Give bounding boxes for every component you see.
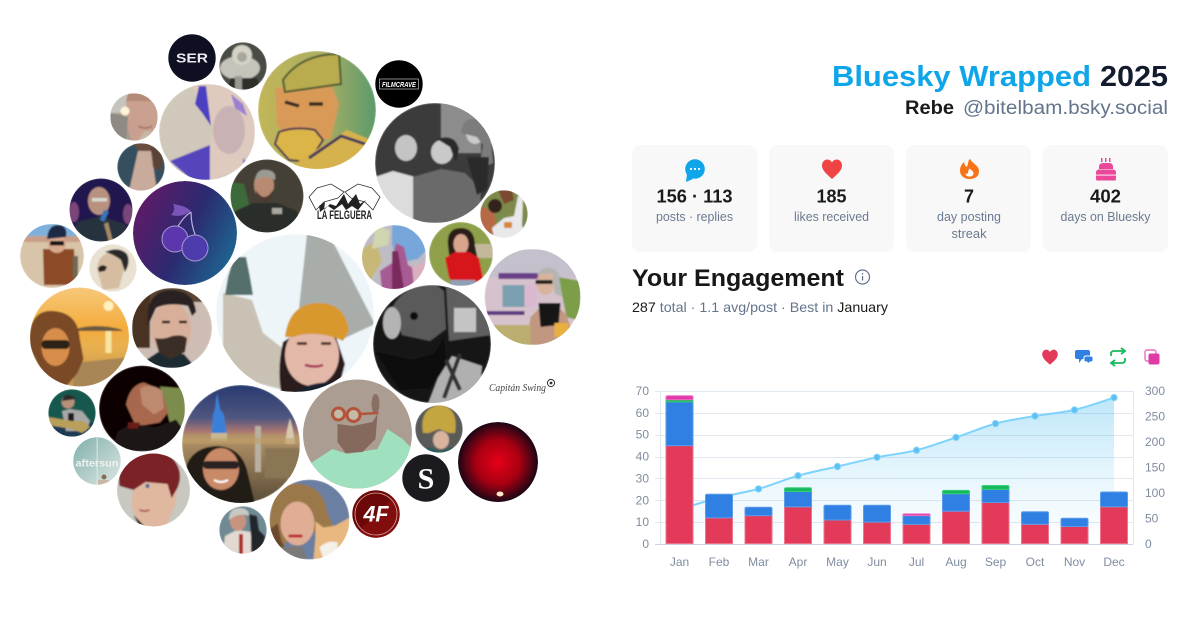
- icon: info: [856, 270, 870, 284]
- right axis labels: 150: [1145, 460, 1165, 474]
- right axis labels: 200: [1145, 435, 1165, 449]
- panel: posts and replies stat card: posts · replies: [656, 209, 733, 224]
- icon: legend replies: [1075, 350, 1093, 364]
- panel: posting streak stat card: 7: [964, 186, 974, 206]
- panel: posting streak stat card: day posting: [937, 209, 1001, 224]
- user name and handle: Rebe: [905, 98, 954, 119]
- heading: Your Engagement: Your Engagement: [632, 265, 844, 292]
- avatar: woman with golden headdress: [415, 405, 463, 453]
- user name and handle: @bitelbam.bsky.social: [963, 98, 1168, 119]
- logo: La Felguera: [309, 184, 380, 222]
- left axis labels: 60: [636, 406, 649, 420]
- title: 2025: [1100, 61, 1168, 93]
- avatar: neck with blue paint: [159, 84, 255, 180]
- avatar: red glowing sphere: [458, 422, 538, 502]
- icon: legend reposts: [1111, 348, 1125, 366]
- avatar: moustache portrait: [89, 244, 137, 292]
- avatar: black and white three women: [375, 103, 495, 223]
- icon: speech bubble: [685, 159, 705, 182]
- avatar: man in black t-shirt: [230, 159, 305, 233]
- icon: legend likes: [1042, 350, 1058, 365]
- panel: likes stat card: likes received: [794, 209, 869, 224]
- avatar: FilmCrave logo: FILMCRAVE: [382, 80, 417, 89]
- avatar: FilmCrave logo: [375, 60, 423, 108]
- month labels: Feb: [709, 555, 730, 569]
- chart: monthly engagement bars and cumulative line: [636, 384, 1165, 569]
- left axis labels: 10: [636, 515, 649, 529]
- avatar: SER logo: [168, 34, 216, 82]
- panel: days on Bluesky stat card: [1043, 145, 1168, 252]
- avatar: S logo: S: [418, 462, 434, 496]
- avatar: pastel abstract: [360, 225, 428, 291]
- left axis labels: [636, 384, 649, 551]
- avatar: woman on the beach: [20, 224, 84, 288]
- month labels: Apr: [789, 555, 807, 569]
- panel: posting streak stat card: streak: [952, 226, 987, 241]
- avatar: aftersun poster: [73, 437, 121, 485]
- engagement summary: 287 total · 1.1 avg/post · Best in January: [632, 299, 888, 315]
- avatar: painted bearded portrait: [258, 51, 376, 170]
- right axis labels: 50: [1145, 512, 1159, 526]
- avatar: 4F logo: 4F: [363, 502, 389, 526]
- month labels: Mar: [748, 555, 769, 569]
- left axis labels: 30: [636, 472, 649, 486]
- avatar: woman in sunlight: [110, 93, 158, 141]
- left axis labels: 20: [636, 494, 649, 508]
- avatar: woman above New York skyline: [182, 385, 300, 504]
- avatar: black and white man: [373, 285, 491, 404]
- avatar: 4F logo: [352, 490, 400, 538]
- panel: days on Bluesky stat card: days on Bluesky: [1060, 209, 1151, 224]
- month labels: Aug: [945, 555, 967, 569]
- month labels: May: [826, 555, 849, 569]
- panel: days on Bluesky stat card: 402: [1090, 186, 1121, 206]
- avatar: singer with microphone: [69, 178, 133, 242]
- icon: legend quotes: [1145, 350, 1160, 364]
- panel: likes stat card: [769, 145, 894, 252]
- avatar: purple cherries: [133, 181, 237, 285]
- avatar: man on the telephone: [219, 506, 267, 554]
- panel: posting streak stat card: [906, 145, 1031, 252]
- left axis labels: 0: [642, 537, 649, 551]
- month labels: Sep: [985, 555, 1006, 569]
- logo: La Felguera: LA FELGUERA: [317, 210, 372, 222]
- icon: flame: [960, 158, 979, 179]
- avatar: illustrated man with red glasses: [302, 379, 412, 489]
- avatar: woman at sunset: [29, 287, 129, 387]
- panel: posts and replies stat card: [632, 145, 757, 252]
- right axis labels: 0: [1145, 537, 1152, 551]
- icon: heart: [822, 160, 842, 179]
- panel: avatar bubble cluster: [20, 34, 580, 560]
- avatar: vintage baby photo: [219, 42, 267, 90]
- month labels: Jun: [867, 555, 887, 569]
- avatar: man in rainbow shirt: [480, 190, 528, 240]
- cumulative points: [755, 394, 1117, 492]
- chart legend: [1042, 348, 1160, 366]
- stacked bars: [666, 396, 1128, 544]
- avatar: main selfie with tower: [216, 234, 375, 394]
- avatar: S logo: [402, 454, 450, 502]
- month labels: Jan: [670, 555, 689, 569]
- month labels: Oct: [1026, 555, 1045, 569]
- cumulative line: [680, 398, 1114, 509]
- panel: likes stat card: 185: [816, 186, 846, 206]
- avatar: SER logo: SER: [176, 50, 209, 66]
- left axis labels: 70: [636, 384, 649, 398]
- avatar: woman in denim: [117, 143, 165, 191]
- avatar: red-haired woman: [116, 451, 190, 528]
- cumulative area: [680, 398, 1114, 544]
- right axis labels: 250: [1145, 410, 1165, 424]
- icon: birthday cake: [1096, 158, 1116, 180]
- panel: posts and replies stat card: 156 · 113: [656, 186, 732, 206]
- month labels: Dec: [1103, 555, 1125, 569]
- avatar: woman in red blouse: [429, 222, 493, 286]
- avatar: woman covering face: [99, 366, 186, 452]
- avatar: woman with cat: [269, 480, 350, 560]
- logo: Capitán Swing: Capitán Swing: [489, 383, 546, 394]
- title: Bluesky Wrapped: [832, 61, 1091, 93]
- avatar: aftersun poster: aftersun: [75, 458, 119, 470]
- right axis labels: [1145, 384, 1165, 551]
- left axis labels: 50: [636, 428, 649, 442]
- right axis labels: 100: [1145, 486, 1165, 500]
- month labels: [670, 555, 1125, 569]
- left axis labels: 40: [636, 450, 649, 464]
- avatar: woman at book fair: [484, 249, 580, 345]
- month labels: Jul: [909, 555, 924, 569]
- month labels: Nov: [1064, 555, 1085, 569]
- right axis labels: 300: [1145, 384, 1165, 398]
- avatar: bearded man with dark hair: [132, 288, 212, 368]
- avatar: man with guitar: [48, 389, 96, 437]
